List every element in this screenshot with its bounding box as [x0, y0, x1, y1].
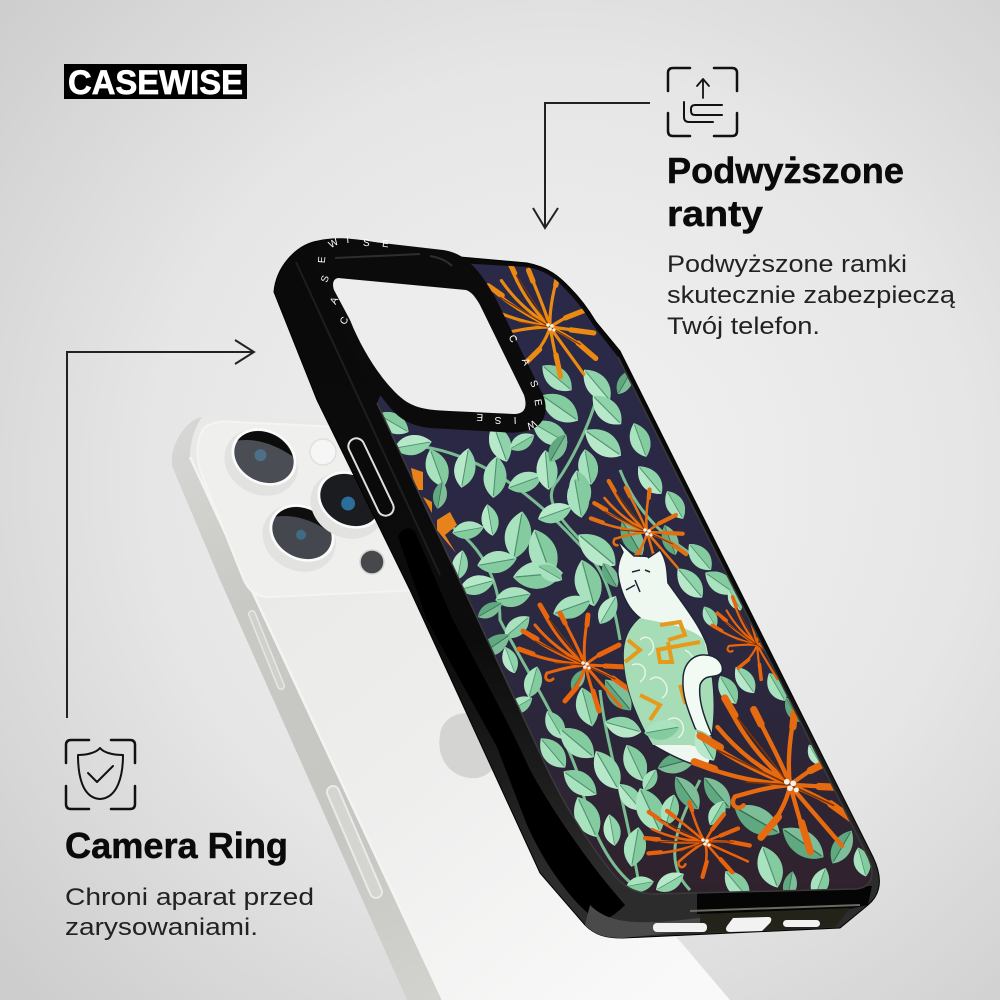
side slot	[398, 528, 625, 920]
camera opening	[333, 278, 526, 414]
ring lettering: E	[381, 239, 390, 250]
text: raised edges description: Podwyższone ramki	[667, 251, 907, 278]
ring lettering: S	[527, 379, 540, 390]
ring lettering: C	[338, 315, 351, 327]
text: raised edges description	[667, 251, 956, 340]
camera plateau	[198, 422, 420, 597]
case side button	[346, 436, 396, 518]
text: camera ring description	[65, 884, 314, 941]
text: raised edges description: Twój telefon.	[667, 313, 820, 340]
ring lettering: I	[346, 235, 350, 246]
phone side band	[172, 417, 443, 1000]
phone body	[172, 415, 730, 1000]
band highlight	[190, 457, 443, 1000]
ring lettering: I	[514, 414, 517, 425]
big flower	[694, 698, 857, 852]
icon: raised edges	[668, 68, 737, 136]
lidar sensor	[360, 550, 384, 574]
case shell	[274, 239, 879, 938]
robe ornament	[625, 622, 700, 720]
ring lettering: A	[519, 357, 532, 368]
arrow: camera ring	[67, 340, 254, 718]
ring lettering: A	[328, 295, 341, 306]
bottom band sheen	[585, 905, 700, 938]
heading: camera ring: Camera Ring	[65, 825, 288, 866]
ring lettering: E	[476, 411, 484, 422]
ring lettering	[317, 235, 544, 432]
ring lettering: E	[531, 398, 544, 407]
ring lettering: W	[524, 417, 538, 432]
flowers	[411, 258, 797, 901]
heading: raised edges: Podwyższone	[667, 150, 904, 191]
ring lettering: W	[327, 236, 341, 251]
arrow: raised edges	[533, 103, 650, 228]
cat tail	[683, 655, 722, 737]
heading: raised edges: ranty	[667, 193, 763, 234]
side buttons	[252, 614, 376, 892]
leaves	[373, 358, 874, 905]
apple logo	[439, 713, 505, 778]
rail highlight	[296, 262, 440, 575]
cat body	[617, 540, 714, 767]
black phone case	[274, 239, 879, 938]
inner wall highlight	[335, 254, 452, 266]
cat leaves overlay	[644, 720, 716, 761]
ring lettering: S	[362, 238, 370, 249]
robe clouds	[632, 637, 695, 738]
flash	[310, 439, 336, 465]
lens: right	[299, 458, 396, 551]
ring body	[313, 239, 546, 433]
white phone back	[172, 415, 730, 1000]
cat face	[626, 570, 650, 592]
cat robe	[624, 618, 714, 747]
artwork ground	[370, 255, 880, 900]
case rim line	[377, 357, 872, 894]
lens: lower left	[251, 491, 348, 584]
cat illustration	[617, 540, 722, 767]
ring lettering: S	[319, 274, 332, 284]
lens: upper left	[213, 415, 310, 508]
bottom bar	[697, 886, 872, 914]
charging port holes	[653, 917, 820, 932]
text: camera ring description: zarysowaniami.	[65, 914, 258, 941]
text: raised edges description: skutecznie zabezpieczą	[667, 282, 956, 309]
ring lettering: S	[494, 414, 501, 425]
ring lettering: E	[317, 256, 328, 264]
printed artwork	[370, 255, 880, 905]
brand logo: CASEWISE	[68, 64, 243, 102]
heading: raised edges	[667, 150, 904, 234]
text: camera ring description: Chroni aparat przed	[65, 884, 314, 911]
vine stems	[426, 404, 702, 891]
icon: shield	[66, 740, 135, 809]
camera ring	[313, 235, 546, 433]
ring lettering: C	[506, 333, 519, 345]
